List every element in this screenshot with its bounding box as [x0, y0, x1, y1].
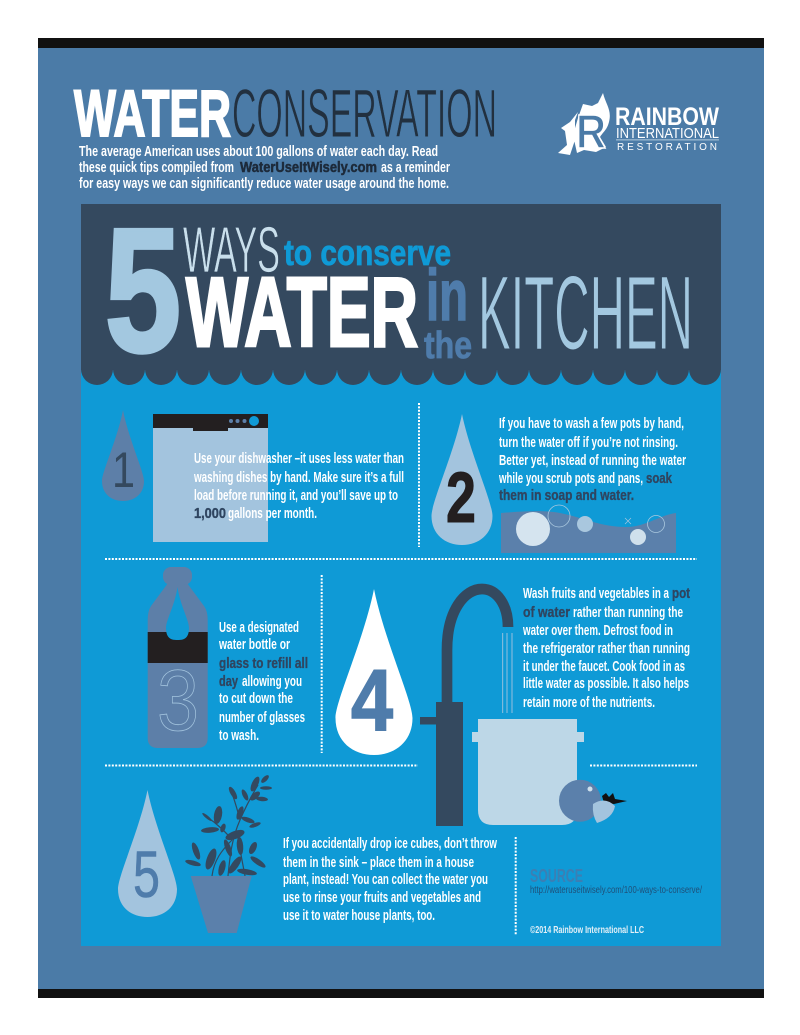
tip 4 text: retain more of the nutrients.: [523, 695, 655, 711]
tip 3 text: glass to refill all: [219, 656, 308, 672]
source and copyright: http://wateruseitwisely.com/100-ways-to-conserve/: [530, 885, 702, 896]
logo: Rainbow International Restoration: R: [576, 106, 606, 159]
tip 2 text: while you scrub pots and pans,: [498, 471, 643, 487]
intro text: [79, 143, 450, 192]
tip 3 text: water bottle or: [218, 637, 290, 653]
logo: Rainbow International Restoration: [558, 93, 719, 159]
intro text: for easy ways we can significantly reduce water usage around the home.: [79, 175, 449, 192]
top black bar: [38, 38, 764, 48]
source and copyright: [530, 866, 702, 936]
icon: pot: [472, 719, 584, 825]
icon: fruit: [559, 780, 627, 823]
heading: 5 ways to conserve water in the kitchen: WATER: [186, 257, 418, 367]
icon: water drop 1: [102, 410, 144, 501]
tip 4 text: it under the faucet. Cook food in as: [523, 659, 685, 675]
logo: Rainbow International Restoration: RESTORATION: [617, 142, 717, 153]
tip 2 text: If you have to wash a few pots by hand,: [499, 416, 684, 432]
tip 4 text: the refrigerator rather than running: [523, 641, 690, 657]
intro text: these quick tips compiled from: [79, 159, 234, 176]
intro text: The average American uses about 100 gallons of water each day. Read: [79, 143, 438, 160]
tip 5 text: If you accidentally drop ice cubes, don’t throw: [283, 836, 497, 852]
tip 3: [148, 567, 308, 749]
tip 4: [336, 586, 690, 826]
icon: water drop 4: [336, 589, 412, 755]
icon: water drop 1: 1: [112, 442, 135, 498]
icon: faucet: [420, 589, 512, 826]
tip 3 text: allowing you: [242, 674, 302, 690]
source and copyright: ©2014 Rainbow International LLC: [530, 924, 644, 936]
tip 5 text: use it to water house plants, too.: [283, 908, 435, 924]
tip 2 text: Better yet, instead of running the water: [499, 453, 686, 469]
heading: 5 ways to conserve water in the kitchen: in: [426, 256, 468, 336]
tip 4 text: pot: [672, 586, 690, 602]
tip 4 text: [522, 586, 690, 711]
tip 3 text: to cut down the: [219, 691, 293, 707]
tip 5 text: [283, 836, 497, 924]
tip 4 text: rather than running the: [573, 605, 683, 621]
tip 4 text: little water as possible. It also helps: [523, 676, 689, 692]
tip 5 text: use to rinse your fruits and vegetables and: [283, 890, 481, 906]
tip 2 text: turn the water off if you’re not rinsing.: [499, 435, 678, 451]
heading: 5 ways to conserve water in the kitchen: the: [424, 325, 472, 367]
icon: water drop 5: 5: [133, 837, 160, 911]
illustration: soapy water: [501, 505, 676, 553]
tip 1 text: load before running it, and you’ll save up to: [194, 488, 398, 504]
heading: 5 ways to conserve water in the kitchen: WAYS: [183, 213, 280, 286]
tip 2 text: them in soap and water.: [499, 488, 634, 504]
tip 4 text: of water: [523, 605, 570, 621]
tip 1 text: Use your dishwasher –it uses less water than: [194, 451, 404, 467]
icon: dishwasher: [153, 414, 268, 542]
tip 2: [432, 414, 686, 553]
icon: water bottle with number 3: 3: [157, 653, 199, 749]
banner: dark header with scalloped edge: [81, 204, 721, 385]
icon: water bottle with number 3: [148, 567, 208, 749]
tip 4 text: Wash fruits and vegetables in a: [523, 586, 670, 602]
tip 1 text: [193, 451, 404, 522]
intro text: WaterUseItWisely.com: [240, 159, 377, 176]
icon: water drop 2: [432, 414, 492, 545]
tip 1: [102, 410, 404, 542]
tip 1 text: 1,000: [194, 506, 226, 522]
tip 5: [118, 774, 497, 933]
tip 3 text: day: [219, 674, 238, 690]
icon: water drop 5: [118, 790, 177, 917]
tip 5 text: plant, instead! You can collect the water you: [283, 872, 488, 888]
tip 2 text: [498, 416, 686, 504]
tip 3 text: to wash.: [219, 728, 259, 744]
logo: Rainbow International Restoration: INTERNATIONAL: [616, 126, 719, 142]
panel: light blue content area: [81, 204, 721, 946]
tip 4 text: water over them. Defrost food in: [522, 623, 673, 639]
tip 3 text: [218, 620, 308, 744]
tip 3 text: number of glasses: [219, 710, 305, 726]
tip 2 text: soak: [646, 471, 673, 487]
text: CONSERVATION: [232, 75, 497, 152]
heading: 5 ways to conserve water in the kitchen: [105, 193, 693, 389]
tip 5 text: them in the sink – place them in a house: [283, 855, 474, 871]
main title: [74, 75, 497, 152]
heading: 5 ways to conserve water in the kitchen: to conserve: [284, 232, 451, 273]
icon: potted plant: [185, 774, 272, 933]
icon: water drop 2: 2: [446, 459, 476, 538]
tip 3 text: Use a designated: [219, 620, 299, 636]
intro text: as a reminder: [381, 159, 450, 176]
logo: Rainbow International Restoration: RAINBOW: [615, 103, 719, 131]
tip 1 text: washing dishes by hand. Make sure it’s a full: [193, 470, 404, 486]
bottom black bar: [38, 989, 764, 998]
heading: 5 ways to conserve water in the kitchen: 5: [105, 193, 181, 389]
main title: WATER: [74, 76, 231, 150]
icon: water drop 4: 4: [351, 652, 393, 749]
source and copyright: SOURCE: [530, 866, 583, 886]
tip 1 text: gallons per month.: [228, 506, 317, 522]
